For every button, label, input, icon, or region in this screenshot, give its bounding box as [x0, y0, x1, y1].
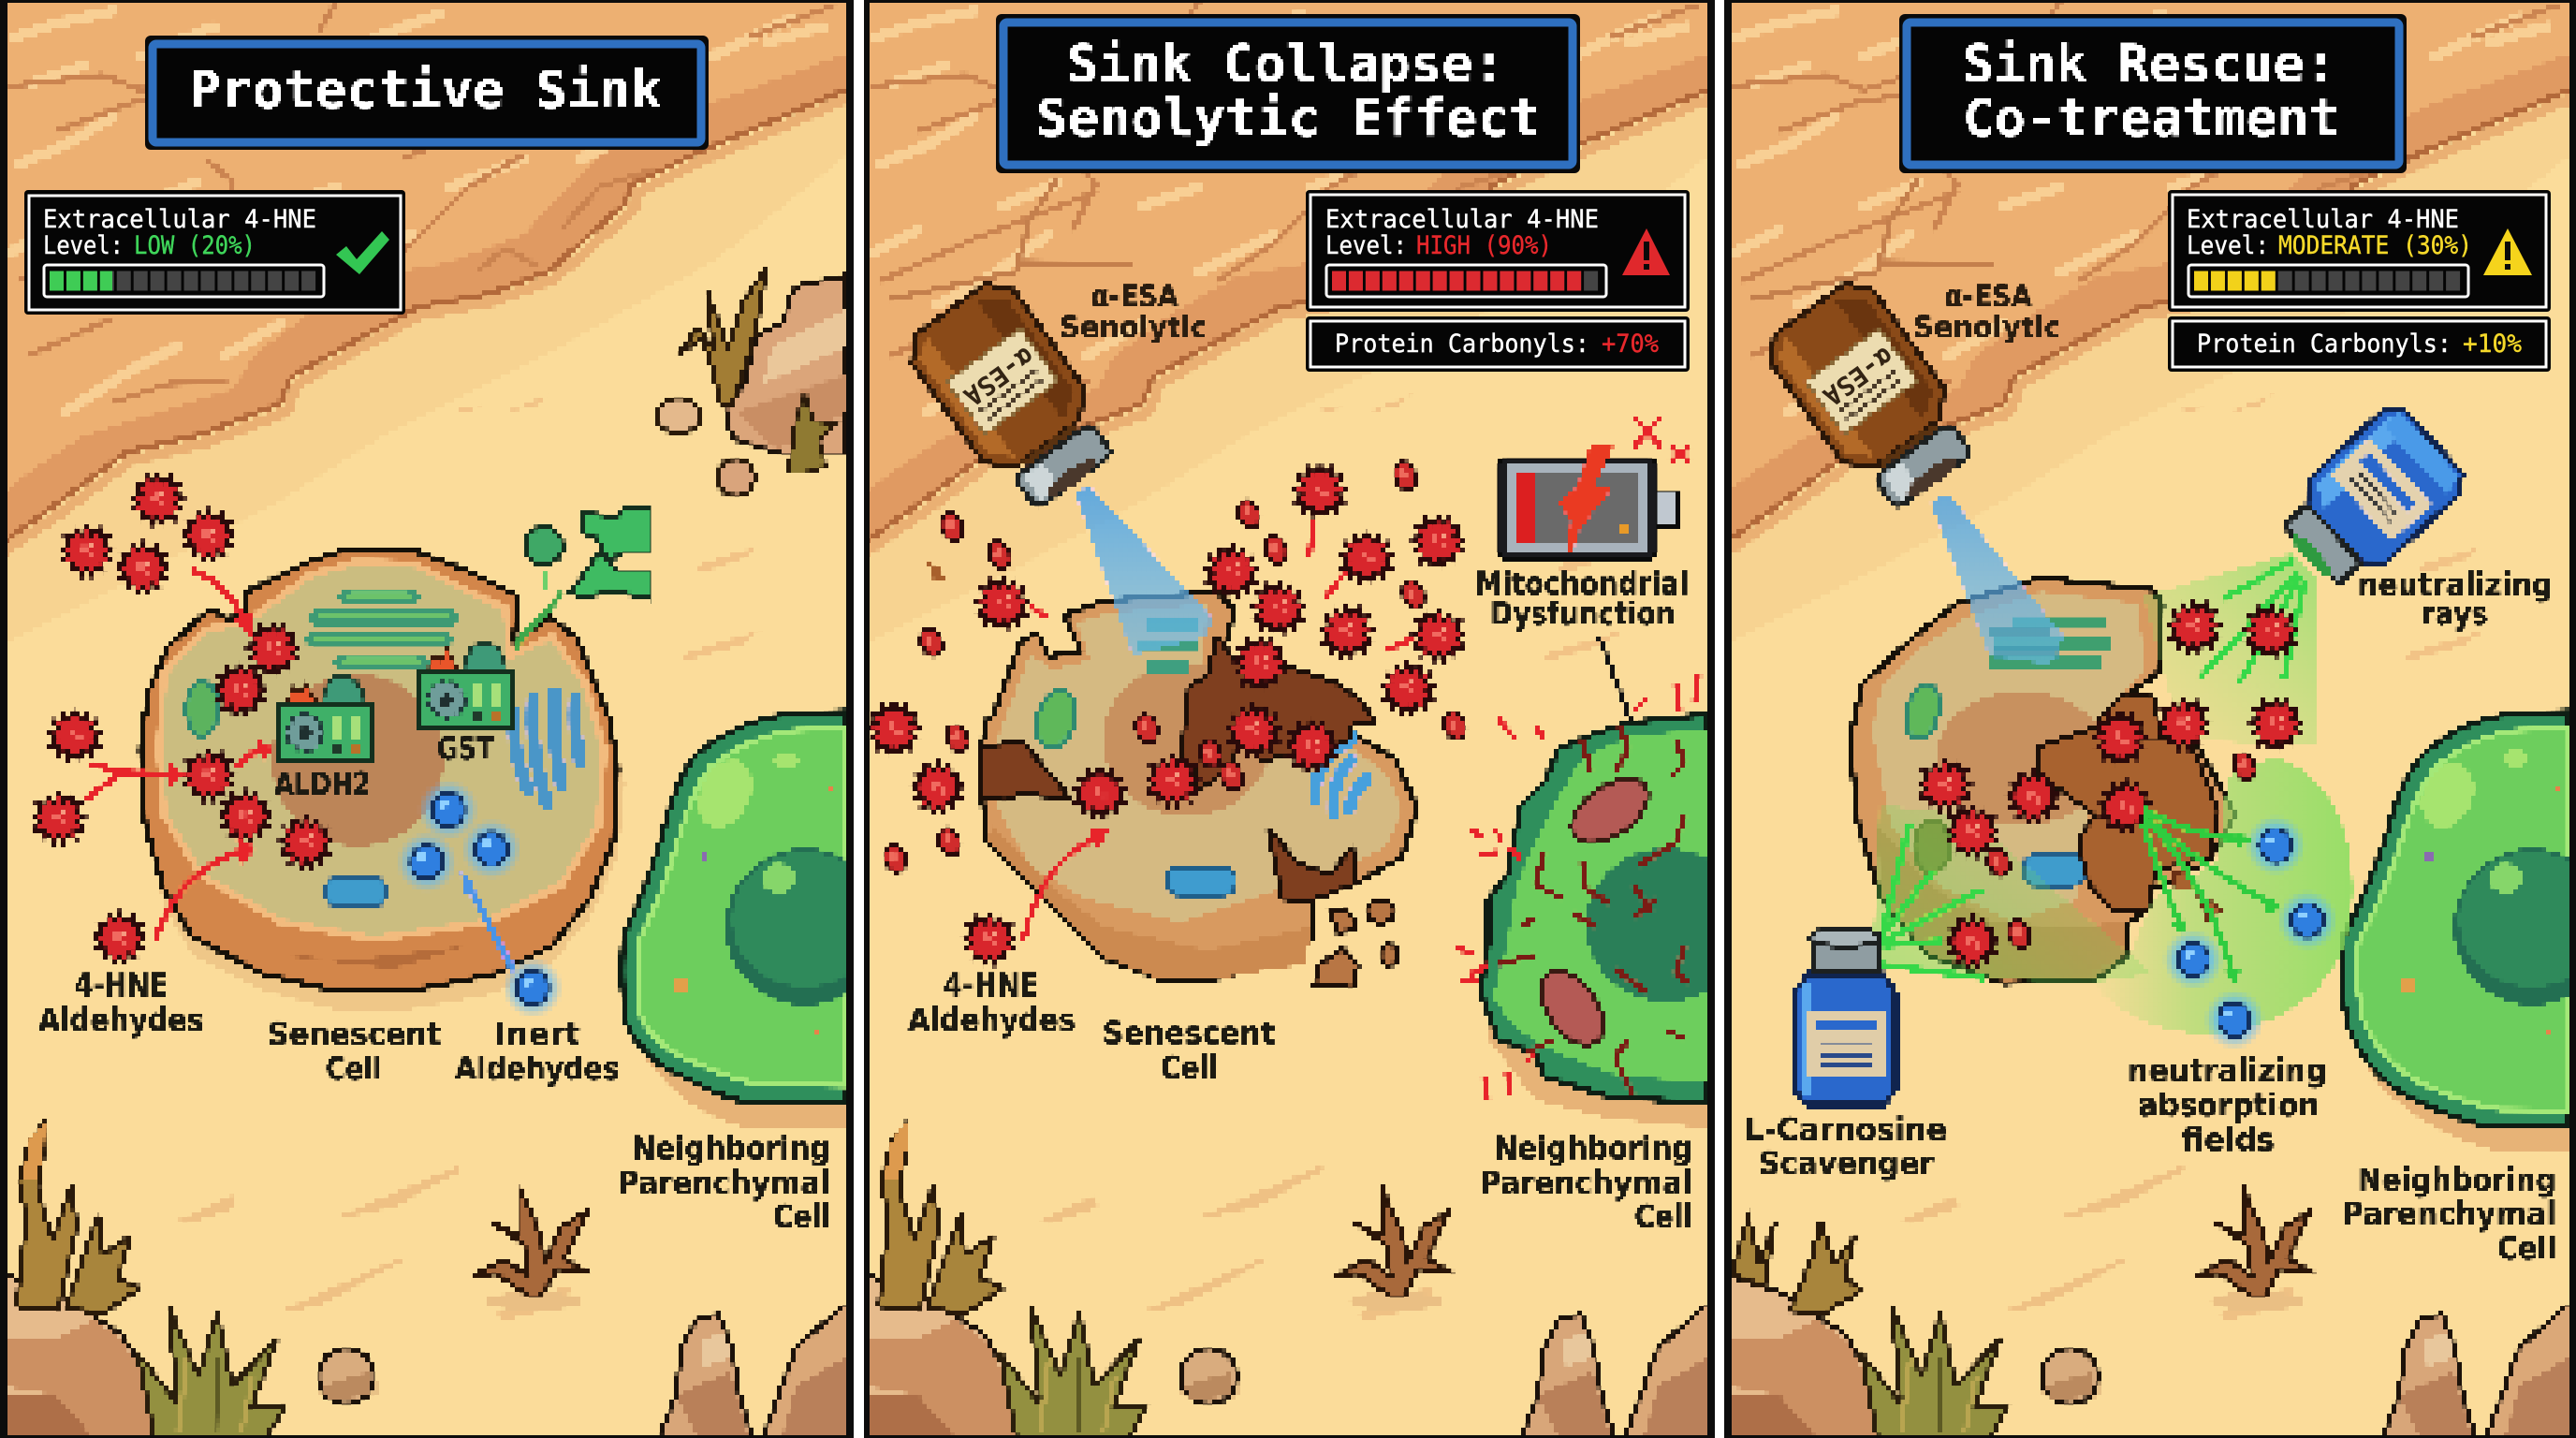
cell wall debris: [1314, 901, 1398, 988]
inert aldehyde spheres: [2163, 815, 2337, 1049]
green rays from L-Carnosine: [1872, 805, 2153, 985]
status box: protein carbonyls +10%: Protein Carbonyls:: [2197, 330, 2452, 359]
label: alpha-ESA Senolytic: Senolytic: [1913, 311, 2061, 345]
red inward arrow: [1023, 828, 1110, 942]
label: Senescent Cell: [1103, 1015, 1275, 1087]
label: Neighboring Parenchymal Cell: [618, 1130, 830, 1236]
title: Sink Rescue:: [1963, 34, 2335, 94]
labels: 4-HNE Aldehydes: Aldehydes: [908, 1002, 1076, 1039]
top right rock outcrop with plants and stones: [657, 270, 846, 496]
enzyme: GST: [418, 643, 512, 729]
mitochondrion: [186, 682, 218, 736]
blue neutralizing vial: [2267, 400, 2471, 601]
label: Mitochondrial Dysfunction: Mitochondrial: [1475, 565, 1689, 603]
short desert plant: [1732, 1217, 1863, 1313]
green conversion arrows: [2144, 810, 2282, 987]
label: Neighboring Parenchymal Cell: Cell: [1634, 1198, 1692, 1236]
label: neutralizing absorption fields: fields: [2182, 1122, 2275, 1159]
label: neutralizing absorption fields: neutralizing: [2128, 1052, 2327, 1090]
label: L-Carnosine Scavenger: L-Carnosine: [1745, 1111, 1947, 1149]
label: neutralizing absorption fields: [2128, 1052, 2327, 1159]
labels: 4-HNE Aldehydes: [908, 967, 1076, 1039]
panel: protective sink: [0, 0, 885, 1438]
green rays from top vial: [2144, 552, 2318, 746]
label: Senescent Cell: Senescent: [268, 1016, 441, 1053]
blue export arrow: [461, 873, 514, 971]
title: [996, 14, 1580, 173]
label: Neighboring Parenchymal Cell: Neighboring: [632, 1130, 830, 1167]
enzyme: ALDH2: [277, 676, 371, 762]
rupture zone: [2039, 728, 2218, 912]
label: Neighboring Parenchymal Cell: Cell: [773, 1198, 830, 1236]
debris inside field: [2172, 871, 2220, 919]
damaged mitochondrion upper: [1560, 766, 1660, 856]
title: Protective Sink: [189, 60, 662, 120]
status box: protein carbonyls +70%: Protein Carbonyls:: [1335, 330, 1589, 359]
desert background: [862, 0, 1714, 1438]
label: neutralizing absorption fields: absorption: [2138, 1087, 2320, 1124]
label: Inert Aldehydes: [455, 1016, 620, 1088]
tall desert plant: [879, 1123, 1003, 1313]
title: [1899, 14, 2407, 173]
enzyme label: GST: GST: [437, 730, 494, 768]
red sparks: [1029, 520, 1415, 652]
status box: extracellular 4-HNE moderate: Level:: [2187, 231, 2269, 260]
golgi: [314, 597, 449, 663]
label: alpha-ESA Senolytic: [1913, 280, 2061, 345]
label: Senescent Cell: [268, 1016, 441, 1088]
status box: extracellular 4-HNE high: Extracellular 4-HNE: [1325, 205, 1599, 234]
status box: extracellular 4-HNE low: [24, 190, 405, 315]
label: Neighboring Parenchymal Cell: [1480, 1130, 1692, 1236]
4-HNE aldehydes: [1919, 600, 2302, 968]
label: Senescent Cell: Cell: [1161, 1049, 1218, 1087]
rock cracks: [889, 178, 1133, 300]
status box: extracellular 4-HNE moderate: [2168, 190, 2551, 312]
label: Senescent Cell: Senescent: [1103, 1015, 1275, 1052]
label: Neighboring Parenchymal Cell: Parenchymal: [1480, 1165, 1692, 1202]
green absorption field: [2086, 756, 2352, 1034]
label: alpha-ESA Senolytic: α-ESA: [1944, 280, 2032, 314]
vesicle: [326, 876, 386, 907]
alpha-ESA bottle: [1759, 272, 1986, 521]
labels: 4-HNE Aldehydes: 4-HNE: [74, 967, 168, 1005]
title: Sink Collapse:: [1067, 34, 1504, 94]
status box: protein carbonyls +70%: [1306, 316, 1690, 372]
status box: protein carbonyls +70%: +70%: [1602, 330, 1659, 359]
label: Inert Aldehydes: Inert: [494, 1016, 580, 1053]
bottle label text: alpha-ESA: α-ESA: [1817, 341, 1899, 412]
label: neutralizing rays: neutralizing: [2358, 566, 2553, 604]
vesicle: [2023, 855, 2085, 886]
beam from alpha-ESA: [1930, 494, 2064, 665]
senescent cell under rescue: [1850, 578, 2235, 983]
neighboring parenchymal cell: [618, 707, 846, 1128]
medication beam: [1075, 487, 1212, 655]
label: alpha-ESA Senolytic: [1060, 280, 1208, 345]
icon: green check mark: [336, 231, 389, 274]
label: Mitochondrial Dysfunction: Dysfunction: [1490, 595, 1676, 633]
status box: extracellular 4-HNE high: Level:: [1325, 231, 1407, 260]
golgi: [1989, 623, 2111, 664]
title: Senolytic Effect: [1036, 88, 1541, 148]
callout line to cell: [1600, 638, 1632, 723]
title: Co-treatment: [1963, 88, 2340, 148]
senescent cell ruptured: [979, 592, 1416, 980]
status box: extracellular 4-HNE high: [1306, 190, 1690, 312]
red sparks: dysfunction: [1632, 416, 1690, 462]
mitochondrion: [1901, 681, 1944, 742]
neighboring parenchymal cell: [2343, 712, 2576, 1153]
senescent cell: [140, 550, 625, 1009]
alpha-ESA bottle: [900, 272, 1127, 521]
green mitochondrion: [1031, 686, 1081, 752]
L-Carnosine vial: [1794, 928, 1895, 1105]
status box: extracellular 4-HNE moderate: MODERATE (30%): [2278, 231, 2472, 260]
green conjugate output: [514, 506, 651, 648]
desert background: [1723, 0, 2575, 1438]
panel: sink rescue: [1723, 0, 2576, 1438]
label: Neighboring Parenchymal Cell: Parenchymal: [618, 1165, 830, 1202]
scene: sink collapse: [862, 0, 1747, 1438]
tall desert plant: [17, 1123, 140, 1313]
label: Neighboring Parenchymal Cell: Neighboring: [1494, 1130, 1692, 1167]
4-HNE aldehydes released: [868, 459, 1469, 965]
red influx arrows: [85, 569, 274, 939]
golgi fragment: [1137, 625, 1200, 667]
mitochondrion tinted: [1914, 820, 1950, 873]
left crack: [979, 740, 1070, 800]
nucleus: [1103, 663, 1271, 816]
status box: extracellular 4-HNE low: Extracellular 4-HNE: [43, 205, 316, 234]
labels: 4-HNE Aldehydes: Aldehydes: [38, 1002, 204, 1039]
labels: 4-HNE Aldehydes: 4-HNE: [944, 967, 1039, 1005]
nucleus: [271, 674, 444, 846]
label: Neighboring Parenchymal Cell: [2342, 1162, 2556, 1268]
desert background: [0, 0, 852, 1438]
golgi through beam: [1989, 632, 2059, 653]
status box: protein carbonyls +10%: +10%: [2463, 330, 2522, 359]
bottle label text: alpha-ESA: α-ESA: [958, 341, 1040, 412]
nucleus: [1936, 691, 2108, 826]
enzyme label: ALDH2: ALDH2: [274, 766, 371, 803]
damaged mitochondrion lower: [1529, 961, 1617, 1056]
icon: depleted battery: [1498, 443, 1679, 558]
label: neutralizing rays: [2358, 566, 2553, 633]
labels: 4-HNE Aldehydes: [38, 967, 204, 1039]
status box: extracellular 4-HNE moderate: Extracellular 4-HNE: [2187, 205, 2459, 234]
damaged neighboring parenchymal cell: [1481, 714, 1747, 1128]
scene: protective sink: [0, 0, 885, 1438]
status box: extracellular 4-HNE high: HIGH (90%): [1416, 231, 1552, 260]
label: Neighboring Parenchymal Cell: Cell: [2497, 1230, 2556, 1268]
label: Neighboring Parenchymal Cell: Neighboring: [2358, 1162, 2556, 1199]
status box: protein carbonyls +10%: [2168, 316, 2551, 372]
label: Senescent Cell: Cell: [326, 1050, 382, 1088]
label: L-Carnosine Scavenger: [1745, 1111, 1947, 1182]
4-HNE aldehyde particles: [33, 473, 332, 964]
panel: sink collapse: [862, 0, 1747, 1438]
endoplasmic reticulum: [514, 693, 580, 805]
label: alpha-ESA Senolytic: α-ESA: [1090, 280, 1178, 314]
scene: sink rescue: [1723, 0, 2576, 1438]
label: L-Carnosine Scavenger: Scavenger: [1759, 1145, 1934, 1182]
dark rupture zone: [1181, 637, 1376, 791]
label: Mitochondrial Dysfunction: [1475, 565, 1689, 633]
right crack: [1267, 827, 1357, 901]
endoplasmic reticulum: [1315, 738, 1371, 819]
icon: red warning triangle: [1622, 228, 1670, 275]
status box: extracellular 4-HNE low: Level:: [43, 231, 124, 260]
status box: extracellular 4-HNE low: LOW (20%): [134, 231, 256, 260]
label: Inert Aldehydes: Aldehydes: [455, 1050, 620, 1088]
title: [145, 36, 709, 150]
rock cracks: [1750, 178, 1994, 300]
damage sparks around neighbor cell: [1456, 674, 1699, 1100]
label: Neighboring Parenchymal Cell: Parenchymal: [2342, 1196, 2556, 1233]
inert aldehyde spheres: [397, 780, 563, 1018]
icon: yellow warning triangle: [2483, 228, 2532, 275]
label: neutralizing rays: rays: [2422, 595, 2488, 633]
label: alpha-ESA Senolytic: Senolytic: [1060, 311, 1208, 345]
vesicle: [1166, 867, 1236, 895]
